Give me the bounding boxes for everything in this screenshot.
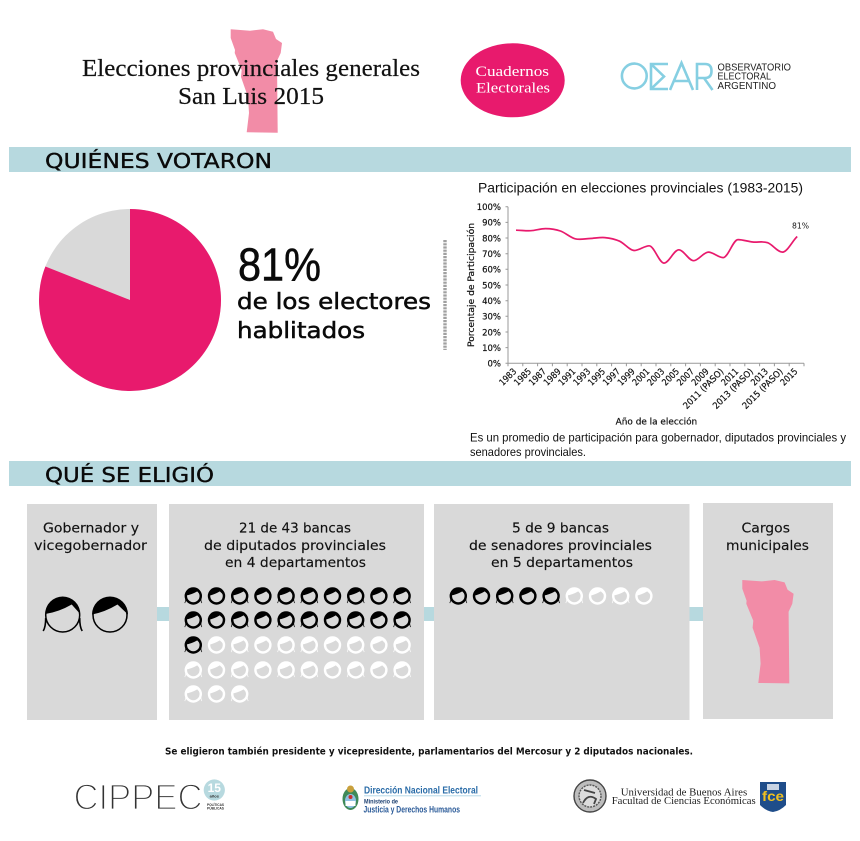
line chart: participation: 10% <box>482 344 501 354</box>
line chart: participation: 2013 <box>750 367 771 388</box>
line chart: participation: 40% <box>482 297 501 307</box>
logo: fce <box>760 782 786 812</box>
logo: CIPPEC: 15 <box>208 781 221 795</box>
panel: cargos municipales <box>703 503 833 719</box>
big statistic: 81% <box>238 238 321 290</box>
logo: Dirección Nacional Electoral: Justicia y Derechos Humanos <box>364 805 460 815</box>
line chart: participation: 1999 <box>616 367 638 388</box>
line chart: participation: 30% <box>482 313 501 323</box>
line chart: participation: 1989 <box>542 367 564 388</box>
line chart: participation: 1985 <box>513 367 534 388</box>
section banner: Quiénes votaron <box>9 147 851 173</box>
line chart: participation: 2011 <box>720 367 741 388</box>
panel: senadores: 5 de 9 bancas <box>512 521 609 537</box>
line chart: participation: Año de la elección <box>616 416 697 428</box>
province map header <box>231 29 282 133</box>
line chart: participation: 1983 <box>498 367 519 388</box>
line chart: participation: 90% <box>482 219 501 229</box>
logo: OEAR <box>622 63 791 92</box>
chart note: Es un promedio de participación para gobernador, diputados provinciales y <box>470 431 846 445</box>
big statistic: de los electores <box>237 290 431 315</box>
logo: CIPPEC: años <box>210 794 220 798</box>
panel: diputados: en 4 departamentos <box>225 555 366 571</box>
logo: OEAR: OBSERVATORIO <box>718 63 791 74</box>
line chart: participation: 2009 <box>690 367 712 388</box>
logo: fce: fce <box>762 788 784 804</box>
line chart: participation: 2003 <box>646 367 667 388</box>
line chart: participation: 2001 <box>631 367 652 388</box>
logo: CIPPEC: PÚBLICAS <box>207 806 225 810</box>
panel: diputados <box>169 504 424 720</box>
line chart: participation: 1993 <box>572 367 593 388</box>
logo: Universidad de Buenos Aires <box>574 780 756 812</box>
line chart: participation <box>466 203 809 428</box>
section banner: Quiénes votaron: QUIÉNES VOTARON <box>45 149 272 173</box>
line chart: participation: 1995 <box>587 367 608 388</box>
line chart: participation: 80% <box>482 234 501 244</box>
line chart: participation: Porcentaje de Participación <box>466 223 477 347</box>
logo: Dirección Nacional Electoral <box>342 785 481 815</box>
panel: senadores: en 5 departamentos <box>491 555 633 571</box>
panel: diputados: de diputados provinciales <box>204 538 386 554</box>
line chart: participation: 20% <box>482 328 501 338</box>
panel: gobernador: Gobernador y <box>43 521 139 537</box>
panel: cargos municipales: Cargos <box>742 521 790 537</box>
line chart: participation: 2005 <box>661 367 682 388</box>
logo: Dirección Nacional Electoral: Dirección Nacional Electoral <box>364 785 478 796</box>
panel: cargos municipales: municipales <box>726 538 809 554</box>
pie chart: 81% <box>39 209 221 391</box>
chart note <box>470 431 846 459</box>
line chart: participation: 1987 <box>528 367 549 388</box>
logo: CIPPEC: CIPPEC <box>74 776 202 817</box>
title: San Luis 2015 <box>178 84 324 110</box>
line chart: participation: 50% <box>482 281 501 291</box>
line chart: participation: 0% <box>488 360 501 370</box>
line chart: participation: 2015 (PASO) <box>741 367 786 412</box>
badge: Cuadernos Electorales: Electorales <box>476 80 550 96</box>
badge: Cuadernos Electorales <box>461 43 565 117</box>
section banner: Qué se eligió: QUÉ SE ELIGIÓ <box>45 463 214 487</box>
panel: diputados: 21 de 43 bancas <box>239 521 351 537</box>
logo: Universidad de Buenos Aires: Facultad de Ciencias Económicas <box>612 795 756 807</box>
logo: OEAR: ARGENTINO <box>718 81 776 92</box>
logo: CIPPEC: POLÍTICAS <box>207 802 225 807</box>
badge: Cuadernos Electorales: Cuadernos <box>476 64 549 80</box>
line chart: participation: 1991 <box>557 367 578 388</box>
line chart: participation: 2007 <box>676 367 697 388</box>
logo: OEAR: ELECTORAL <box>718 72 771 82</box>
panel: gobernador <box>27 504 157 720</box>
line chart: participation: 1997 <box>602 367 623 388</box>
footer note: Se eligieron también presidente y vicepresidente, parlamentarios del Mercosur y 2 diputados nacionales. <box>165 747 693 758</box>
chart note: senadores provinciales. <box>470 445 586 459</box>
logo: Dirección Nacional Electoral: Ministerio de <box>364 798 398 805</box>
line chart: participation: 81% <box>792 222 809 230</box>
panel: senadores: de senadores provinciales <box>469 538 652 554</box>
line chart: participation: 2011 (PASO) <box>682 367 726 412</box>
logo: Universidad de Buenos Aires: Universidad de Buenos Aires <box>621 787 747 799</box>
panel: gobernador: vicegobernador <box>34 538 147 554</box>
chart title: Participación en elecciones provinciales (1983-2015) <box>478 180 803 196</box>
panel: senadores <box>434 504 690 720</box>
section banner: Qué se eligió <box>9 461 851 487</box>
line chart: participation: 60% <box>482 266 501 276</box>
big statistic: hablitados <box>237 319 365 344</box>
line chart: participation: 2015 <box>779 367 800 388</box>
line chart: participation: 2013 (PASO) <box>711 367 756 412</box>
title: Elecciones provinciales generales <box>82 56 420 82</box>
line chart: participation: 70% <box>482 250 501 260</box>
big statistic <box>237 238 431 344</box>
title <box>82 56 420 110</box>
line chart: participation: 100% <box>477 203 501 213</box>
